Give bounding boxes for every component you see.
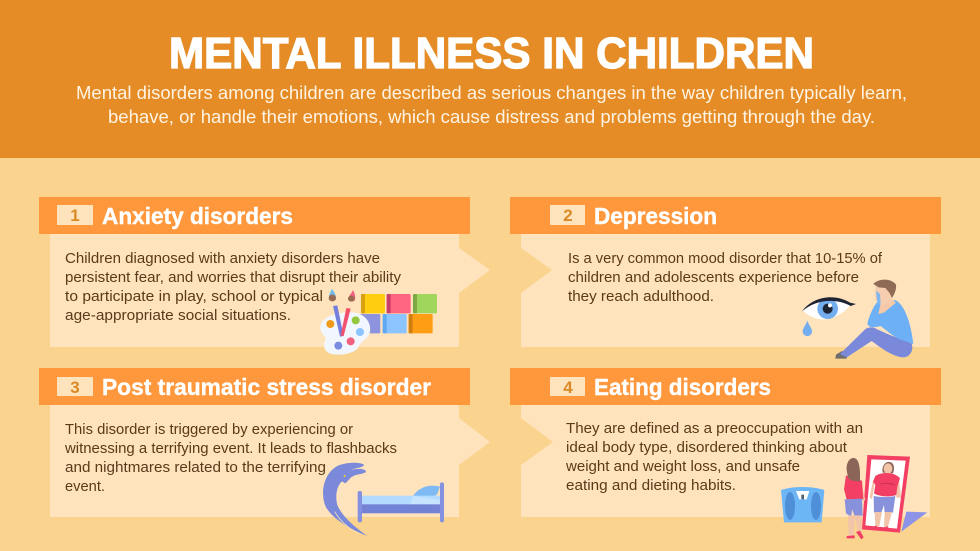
number badge 1 [57,205,93,225]
body text: witnessing a terrifying event. It leads to flashbacks [64,441,397,457]
body text: age-appropriate social situations. [65,308,291,324]
icon: girl looking in mirror [844,455,927,539]
panel: post traumatic stress disorder [39,368,490,536]
body text: event. [65,479,105,495]
heading: eating disorders: Eating disorders [594,374,771,400]
number badge 4 [550,377,585,397]
body text: persistent fear, and worries that disrupt their ability [65,270,402,286]
body text [64,422,397,495]
number badge 3: 3 [70,378,80,397]
title: MENTAL ILLNESS IN CHILDREN [169,29,814,78]
number badge 2: 2 [563,206,573,225]
intro text [76,83,907,127]
body text: They are defined as a preoccupation with an [566,421,863,437]
icon: crying eye [802,297,856,336]
body text: weight and weight loss, and unsafe [565,459,800,475]
body text: Children diagnosed with anxiety disorders have [65,251,380,267]
icon: paint palette and colour blocks [320,289,437,355]
heading: anxiety disorders: Anxiety disorders [102,203,293,229]
body text [65,251,402,324]
body text: This disorder is triggered by experiencing or [65,422,353,438]
body text: Is a very common mood disorder that 10-15% of [568,251,883,267]
heading: depression: Depression [594,203,717,229]
body text: they reach adulthood. [568,289,714,305]
icon: weighing scale [781,487,824,522]
number badge 1: 1 [70,206,80,225]
body text: ideal body type, disordered thinking about [566,440,847,456]
intro text: behave, or handle their emotions, which cause distress and problems getting through the day. [108,107,875,127]
intro text: Mental disorders among children are described as serious changes in the way children typically learn, [76,83,907,103]
icon: sad seated man [835,280,913,359]
body text: eating and dieting habits. [566,478,736,494]
header band [0,0,980,158]
number badge 4: 4 [563,378,573,397]
panel: depression [510,197,941,359]
body text: to participate in play, school or typical [65,289,323,305]
body text [568,251,883,305]
body text: children and adolescents experience before [568,270,859,286]
panel: eating disorders [510,368,941,539]
number badge 2 [550,205,585,225]
panel: anxiety disorders [39,197,490,355]
body text: and nightmares related to the terrifying [65,460,326,476]
number badge 3 [57,377,93,397]
icon: wave over bed [323,463,444,536]
body text [565,421,863,494]
heading: post traumatic stress disorder: Post traumatic stress disorder [102,374,431,400]
